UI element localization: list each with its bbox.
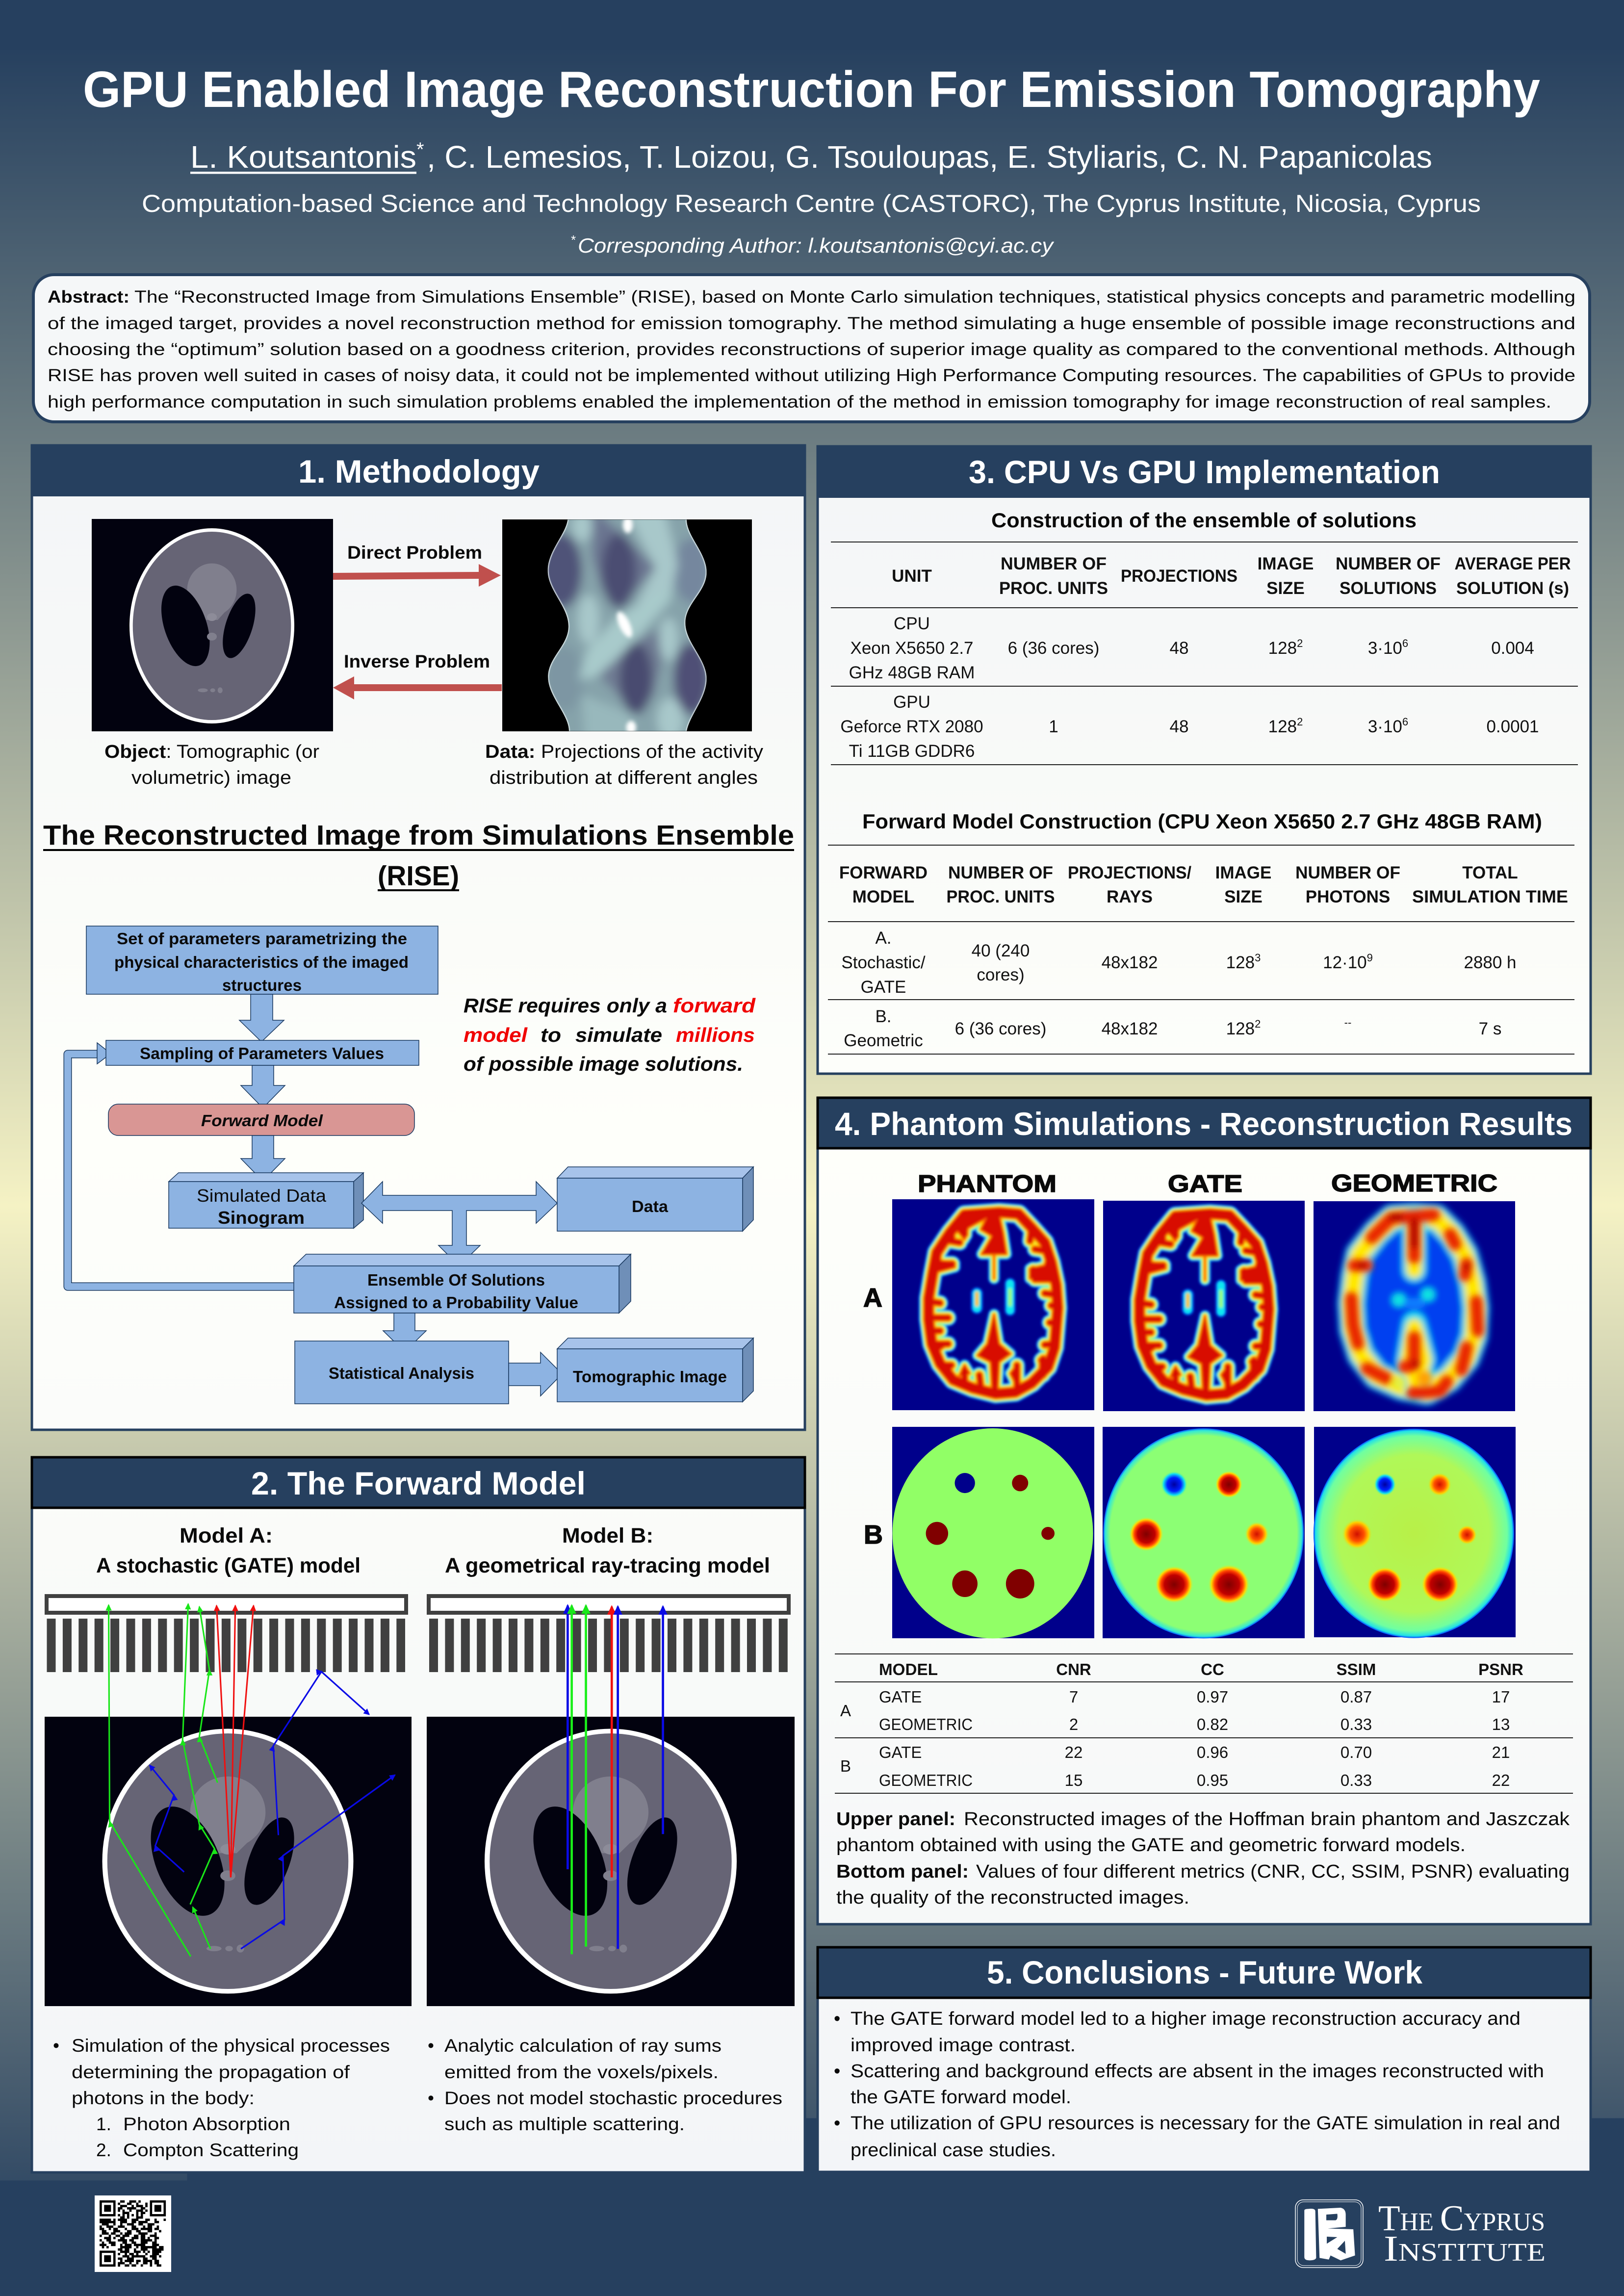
bullets: conclusions: • [834, 2113, 840, 2134]
abstract text: Abstract: [48, 287, 129, 307]
flowchart: RISE pipeline [68, 926, 753, 1404]
table: metrics: 7 [1069, 1688, 1078, 1706]
ray paths: model A [108, 1604, 395, 1957]
table: forward model construction: 128 [1226, 1019, 1255, 1038]
table: construction of the ensemble: 2 [1297, 716, 1303, 728]
bullets: model B: • [428, 2088, 434, 2108]
table: metrics: 0.70 [1340, 1743, 1372, 1761]
logo: The Cyprus Institute [1295, 2198, 1546, 2269]
bullets: model A: Simulation of the physical processes [72, 2036, 390, 2056]
table: forward model construction: 2 [1255, 1018, 1261, 1030]
table: construction of the ensemble: 6 [1402, 637, 1408, 649]
panel: 2. the forward model [32, 1457, 805, 2172]
bullets: model A: 2. [96, 2140, 111, 2160]
table: metrics: 22 [1492, 1771, 1510, 1789]
abstract text: The “Reconstructed Image from Simulations Ensemble” (RISE), based on Monte Carlo simulation techniques, statistical physics concepts and parametric modelling [134, 287, 1575, 307]
table: metrics: CC [1201, 1660, 1224, 1678]
flow box: forward model [108, 1104, 414, 1135]
heading: RISE [43, 820, 794, 892]
flow box: forward model: Forward Model [201, 1111, 323, 1130]
table: forward model construction: IMAGE [1215, 863, 1271, 882]
flow box: set of parameters: physical characteristics of the imaged [114, 953, 409, 971]
bullets: model A: photons in the body: [72, 2088, 255, 2108]
flow box: sampling [106, 1040, 419, 1065]
table: forward model construction: SIMULATION TIME [1412, 887, 1568, 906]
ray paths: model B [567, 1605, 663, 1954]
table: metrics: MODEL [879, 1660, 938, 1678]
panel: 3. CPU vs GPU [817, 445, 1592, 1074]
table: forward model construction [828, 845, 1574, 1054]
bullets: model A: determining the propagation of [72, 2062, 350, 2082]
arrow: direct problem [333, 542, 501, 587]
authors: * [416, 139, 424, 160]
bullets: conclusions: preclinical case studies. [851, 2140, 1056, 2161]
table: construction of the ensemble: GHz 48GB RAM [849, 663, 975, 682]
row label A: A [863, 1283, 882, 1313]
table: forward model construction: Geometric [844, 1031, 923, 1050]
bullets: conclusions: The utilization of GPU resources is necessary for the GATE simulation in real and [851, 2113, 1560, 2134]
flow box: ensemble of solutions: Ensemble Of Solutions [367, 1271, 545, 1289]
table: construction of the ensemble: SIZE [1266, 579, 1305, 598]
arrow: direct problem: Direct Problem [347, 542, 482, 563]
flow box: ensemble of solutions [294, 1254, 631, 1313]
arrow: sampling to forward model [241, 1065, 285, 1108]
bullets: model B: Does not model stochastic procedures [444, 2088, 782, 2108]
table: metrics [835, 1654, 1573, 1793]
caption: upper and bottom panels: Values of four different metrics (CNR, CC, SSIM, PSNR) evaluating [976, 1861, 1570, 1882]
table: construction of the ensemble: IMAGE [1258, 554, 1314, 573]
table: metrics: 22 [1065, 1743, 1083, 1761]
table: construction of the ensemble: Xeon X5650 2.7 [850, 639, 974, 658]
table: forward model construction: 128 [1226, 953, 1255, 972]
table: construction of the ensemble: UNIT [892, 567, 932, 586]
bullets: conclusions: Scattering and background effects are absent in the images reconstructed with [851, 2061, 1544, 2082]
bullets: conclusions: • [834, 2009, 840, 2029]
table: metrics: 0.33 [1340, 1771, 1372, 1789]
image: brain GATE [1103, 1201, 1305, 1411]
image: phantom model A [45, 1717, 412, 2006]
arrow: ensemble to analysis [383, 1313, 426, 1352]
image: Jaszczak phantom [892, 1427, 1094, 1638]
table: forward model construction: GATE [861, 978, 906, 997]
authors: , C. Lemesios, T. Loizou, G. Tsouloupas, E. Styliaris, C. N. Papanicolas [427, 139, 1432, 175]
QR code [95, 2195, 171, 2272]
bullets: model A: • [53, 2036, 59, 2056]
heading: model A: A stochastic (GATE) model [96, 1554, 361, 1577]
table: construction of the ensemble: PROJECTIONS [1121, 567, 1237, 586]
table: construction of the ensemble: 48 [1170, 717, 1188, 736]
flow box: set of parameters [86, 926, 438, 994]
table: forward model construction: 7 s [1479, 1019, 1501, 1038]
arrow: parameters to sampling [239, 994, 284, 1042]
heading: model B: Model B: [562, 1524, 653, 1548]
heading: model B [445, 1524, 770, 1577]
panel: 5. conclusions [818, 1947, 1591, 2172]
table: forward model construction: NUMBER OF [948, 863, 1053, 882]
callout: RISE requires only a forward model: RISE requires only a [464, 994, 667, 1017]
arrow: forward model to simulated data [241, 1135, 285, 1181]
callout: RISE requires only a forward model: model [464, 1024, 528, 1046]
bullets: conclusions: The GATE forward model led to a higher image reconstruction accuracy and [851, 2009, 1521, 2029]
table: forward model construction: A. [875, 929, 892, 948]
callout: RISE requires only a forward model: simulate [575, 1024, 662, 1046]
table: forward model construction: Stochastic/ [841, 953, 926, 972]
table: construction of the ensemble: 1 [1049, 717, 1058, 736]
table: metrics: 0.97 [1197, 1688, 1228, 1706]
bullets: model A: Compton Scattering [123, 2140, 299, 2160]
table: construction of the ensemble: AVERAGE PER [1455, 554, 1571, 573]
table: construction of the ensemble [831, 542, 1578, 765]
bullets: conclusions: • [834, 2061, 840, 2082]
table: construction of the ensemble: 0.0001 [1486, 717, 1539, 736]
table: metrics: 0.82 [1197, 1715, 1228, 1733]
table: forward model construction: PHOTONS [1306, 887, 1390, 906]
table: metrics: GEOMETRIC [879, 1771, 973, 1789]
image: sinogram data [502, 490, 752, 760]
table: forward model construction: 12·10 [1323, 953, 1367, 972]
detector: model A [47, 1596, 406, 1645]
heading: phantom simulations: 4. Phantom Simulations - Reconstruction Results [835, 1106, 1572, 1142]
row label B: B [864, 1520, 883, 1549]
table: construction of the ensemble: SOLUTIONS [1340, 579, 1437, 598]
table: metrics: 0.87 [1340, 1688, 1372, 1706]
table: forward model construction: 9 [1367, 952, 1373, 964]
table: construction of the ensemble: 2 [1297, 637, 1303, 649]
heading: CPU vs GPU: 3. CPU Vs GPU Implementation [969, 454, 1440, 490]
table: metrics: 0.95 [1197, 1771, 1228, 1789]
caption: upper and bottom panels [836, 1809, 1570, 1908]
table: forward model construction: 6 (36 cores) [955, 1019, 1046, 1038]
image: Jaszczak GATE [1103, 1427, 1305, 1638]
heading: model A [96, 1524, 361, 1577]
table: construction of the ensemble: 48 [1170, 639, 1188, 658]
table: forward model construction: PROC. UNITS [947, 887, 1055, 906]
callout: RISE requires only a forward model: millions [676, 1024, 755, 1046]
arrow: compare data [361, 1182, 557, 1266]
column labels: PHANTOM [918, 1171, 1057, 1197]
flow box: set of parameters: Set of parameters parametrizing the [117, 929, 407, 948]
bullets: model A: Photon Absorption [123, 2114, 290, 2134]
table: forward model construction: RAYS [1107, 887, 1153, 906]
table: construction of the ensemble: 3·10 [1368, 717, 1402, 736]
logo wordmark [1378, 2198, 1546, 2269]
caption: object: Object: Tomographic (or [104, 742, 319, 762]
flow box: ensemble of solutions: Assigned to a Probability Value [334, 1293, 578, 1312]
flow box: set of parameters: structures [222, 976, 302, 994]
feedback loop arrow [68, 1043, 295, 1287]
table: construction of the ensemble: 128 [1268, 717, 1297, 736]
detector: model B [429, 1596, 789, 1645]
table: construction of the ensemble: 3·10 [1368, 639, 1402, 658]
abstract text: choosing the “optimum” solution based on a goodness criterion, provides reconstructions of superior image quality as compared to the conventional methods. Although [48, 340, 1575, 359]
panel: abstract [33, 275, 1590, 422]
panel: 4. phantom simulations [818, 1098, 1591, 1924]
bullets: conclusions: improved image contrast. [851, 2035, 1076, 2056]
arrow: inverse problem: Inverse Problem [344, 651, 490, 671]
table: construction of the ensemble: NUMBER OF [1336, 554, 1441, 573]
bullets: model B [428, 2036, 782, 2134]
table: forward model construction: FORWARD [839, 863, 928, 882]
table: metrics: CNR [1056, 1660, 1091, 1678]
caption: upper and bottom panels: Reconstructed images of the Hoffman brain phantom and Jaszczak [964, 1809, 1570, 1830]
table: construction of the ensemble: 6 [1402, 716, 1408, 728]
table: forward model construction: 2880 h [1464, 953, 1517, 972]
heading: RISE: The Reconstructed Image from Simulations Ensemble [43, 820, 794, 851]
table: forward model construction: 48x182 [1102, 1019, 1158, 1038]
logo wordmark: THE CYPRUS [1378, 2198, 1545, 2239]
table: forward model construction: 40 (240 [972, 941, 1030, 960]
arrow: analysis to image [509, 1352, 562, 1396]
flow box: simulated data [169, 1173, 363, 1228]
subheading: construction of ensemble: Construction of the ensemble of solutions [991, 509, 1417, 532]
table: construction of the ensemble: Ti 11GB GDDR6 [849, 742, 975, 761]
heading: model B: A geometrical ray-tracing model [445, 1554, 770, 1577]
heading: conclusions: 5. Conclusions - Future Work [987, 1954, 1422, 1990]
table: forward model construction: MODEL [852, 887, 914, 906]
logo wordmark: INSTITUTE [1384, 2229, 1546, 2269]
flow box: statistical analysis: Statistical Analysis [329, 1364, 474, 1382]
panel: 1. methodology [31, 444, 806, 1430]
table: metrics: GEOMETRIC [879, 1715, 973, 1733]
bullets: model B: emitted from the voxels/pixels. [444, 2062, 719, 2082]
caption: data: Data: Projections of the activity [485, 742, 763, 762]
flow box: tomographic image [557, 1338, 753, 1402]
bullets: model B: Analytic calculation of ray sums [444, 2036, 722, 2056]
bullets: model A: 1. [96, 2114, 111, 2134]
table: forward model construction: SIZE [1224, 887, 1263, 906]
abstract text [48, 287, 1575, 412]
caption: data [485, 742, 763, 788]
bullets: model A [53, 2036, 390, 2160]
image: Jaszczak geometric [1314, 1427, 1516, 1638]
table: forward model construction: NUMBER OF [1295, 863, 1400, 882]
caption: object: volumetric) image [131, 768, 291, 788]
flow box: statistical analysis [295, 1341, 509, 1404]
callout: RISE requires only a forward model: forward [673, 994, 756, 1017]
caption: object [104, 742, 319, 788]
heading: RISE: (RISE) [378, 860, 459, 892]
table: metrics: 13 [1492, 1715, 1510, 1733]
table: forward model construction: TOTAL [1462, 863, 1518, 882]
table: construction of the ensemble: Geforce RTX 2080 [840, 717, 983, 736]
heading: model A: Model A: [180, 1524, 273, 1548]
bullets: model B: • [428, 2036, 434, 2056]
table: metrics: 0.96 [1197, 1743, 1228, 1761]
callout: RISE requires only a forward model: to [541, 1024, 561, 1046]
corresponding author: Corresponding Author: l.koutsantonis@cyi.ac.cy [578, 234, 1055, 257]
flow box: simulated data: Simulated Data [197, 1186, 327, 1206]
image: phantom model B [427, 1717, 795, 2006]
image: brain geometric [1314, 1201, 1515, 1411]
callout: RISE requires only a forward model: of possible image solutions. [464, 1053, 743, 1075]
column labels: GEOMETRIC [1331, 1170, 1497, 1197]
callout: RISE requires only a forward model [464, 994, 756, 1075]
table: forward model construction: cores) [977, 965, 1025, 984]
flow box: sampling: Sampling of Parameters Values [140, 1044, 384, 1062]
table: metrics: A [840, 1702, 851, 1720]
table: construction of the ensemble: GPU [893, 693, 930, 712]
table: metrics: 21 [1492, 1743, 1510, 1761]
table: metrics: B [840, 1757, 851, 1775]
table: construction of the ensemble: CPU [894, 614, 930, 633]
image: brain phantom [892, 1199, 1094, 1410]
column labels [918, 1170, 1497, 1197]
flow box: tomographic image: Tomographic Image [573, 1367, 727, 1386]
bullets: conclusions: the GATE forward model. [851, 2087, 1071, 2108]
table: metrics: PSNR [1478, 1660, 1523, 1678]
corresponding author: * [570, 232, 576, 247]
table: forward model construction: PROJECTIONS/ [1068, 863, 1191, 882]
subheading: forward model construction: Forward Model Construction (CPU Xeon X5650 2.7 GHz 48GB RAM) [862, 810, 1542, 833]
bullets: model B: such as multiple scattering. [444, 2114, 685, 2134]
table: metrics: 15 [1065, 1771, 1083, 1789]
caption: upper and bottom panels: the quality of the reconstructed images. [836, 1887, 1189, 1908]
bullets: conclusions [834, 2009, 1560, 2161]
table: construction of the ensemble: 128 [1268, 639, 1297, 658]
logo emblem [1295, 2200, 1363, 2268]
title: GPU Enabled Image Reconstruction For Emission Tomography [83, 61, 1540, 118]
caption: upper and bottom panels: Bottom panel: [836, 1861, 969, 1882]
authors: L. Koutsantonis [190, 139, 416, 175]
column labels: GATE [1168, 1171, 1242, 1197]
table: forward model construction: 3 [1255, 952, 1261, 964]
flow box: data: Data [632, 1197, 669, 1215]
table: forward model construction: -- [1344, 1016, 1351, 1029]
abstract text: high performance computation in such simulation problems enabled the implementation of the method in emission tomography for image reconstruction of real samples. [48, 392, 1551, 412]
table: forward model construction: 48x182 [1102, 953, 1158, 972]
abstract text: of the imaged target, provides a novel reconstruction method for emission tomography. The method simulating a huge ensemble of possible image reconstructions and [48, 314, 1575, 333]
arrow: inverse problem [333, 651, 502, 699]
affiliation: Computation-based Science and Technology Research Centre (CASTORC), The Cyprus Institute, Nicosia, Cyprus [142, 190, 1481, 217]
caption: upper and bottom panels: phantom obtained with using the GATE and geometric forward models. [836, 1835, 1466, 1856]
table: construction of the ensemble: 6 (36 cores) [1008, 639, 1099, 658]
image: object phantom [92, 519, 333, 731]
table: metrics: GATE [879, 1688, 922, 1706]
table: metrics: SSIM [1337, 1660, 1376, 1678]
abstract text: RISE has proven well suited in cases of noisy data, it could not be implemented without utilizing High Performance Computing resources. The capabilities of GPUs to provide [48, 366, 1575, 385]
table: construction of the ensemble: SOLUTION (s) [1456, 579, 1569, 598]
table: construction of the ensemble: NUMBER OF [1001, 554, 1107, 573]
heading: forward model: 2. The Forward Model [251, 1465, 586, 1501]
table: construction of the ensemble: PROC. UNITS [999, 579, 1108, 598]
heading: methodology: 1. Methodology [298, 453, 540, 490]
flow box: simulated data: Sinogram [218, 1208, 305, 1228]
flow box: data [557, 1167, 753, 1231]
table: metrics: 0.33 [1340, 1715, 1372, 1733]
table: construction of the ensemble: 0.004 [1491, 639, 1534, 658]
table: forward model construction: B. [875, 1007, 892, 1026]
table: metrics: 2 [1069, 1715, 1078, 1733]
table: metrics: GATE [879, 1743, 922, 1761]
caption: upper and bottom panels: Upper panel: [836, 1809, 955, 1830]
caption: data: distribution at different angles [490, 768, 758, 788]
table: metrics: 17 [1492, 1688, 1510, 1706]
